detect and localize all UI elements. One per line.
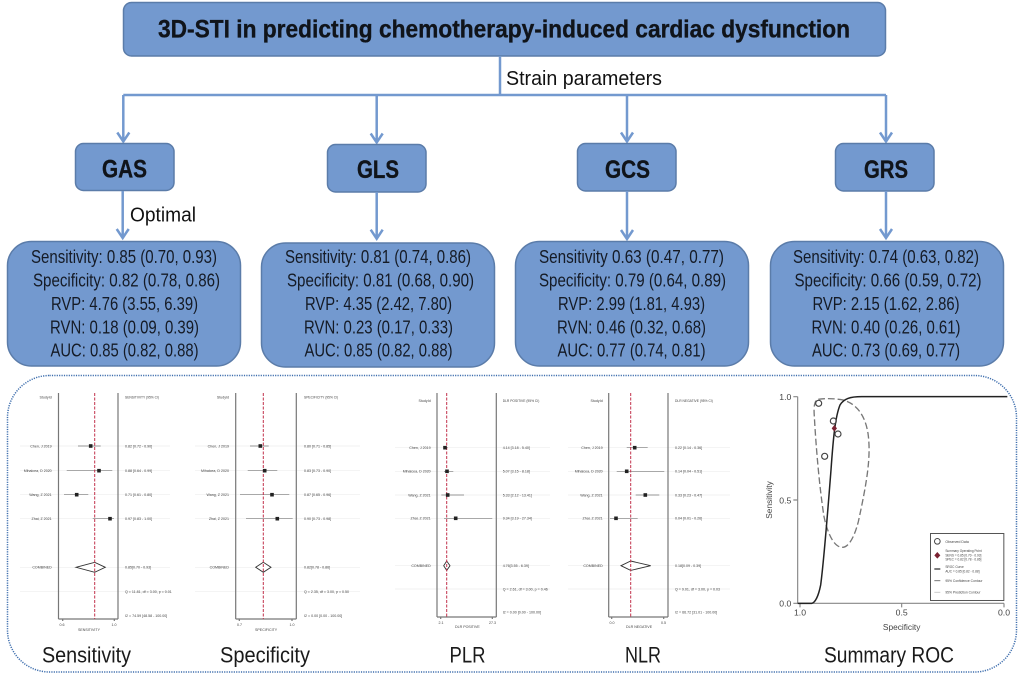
forest plot: NLR: 0.33 [0.23 - 0.47] <box>675 493 702 497</box>
panel: GAS results: Specificity: 0.82 (0.78, 0.86) <box>33 271 220 291</box>
forest plot: NLR: 0.14 [0.04 - 0.51] <box>675 470 702 474</box>
panel: GRS results: Specificity: 0.66 (0.59, 0.72) <box>794 271 982 291</box>
panel: GAS: GAS <box>102 156 147 184</box>
chart: summary ROC: Sensitivity <box>764 480 774 519</box>
title: 3D-STI in predicting chemotherapy-induced cardiac dysfunction <box>158 16 850 44</box>
forest plot: PLR: Chen, J 2019 <box>409 446 431 450</box>
forest plot: PLR: 5.33 [2.12 - 13.41] <box>503 493 532 497</box>
forest plot: specificity: 0.87 [0.65 - 0.96] <box>304 493 331 497</box>
forest plot: specificity: Q = 2.35, df = 3.00, p = 0.50 <box>304 590 349 594</box>
panel: GAS results: RVP: 4.76 (3.55, 6.39) <box>51 294 198 314</box>
forest plot: sensitivity: StudyId <box>40 396 52 400</box>
chart: summary ROC: 0.5 <box>779 495 792 505</box>
forest plot: sensitivity: 0.97 [0.83 - 1.00] <box>125 517 152 521</box>
forest plot: PLR: 9.34 [3.19 - 27.34] <box>503 517 532 521</box>
arrows: parameter to results <box>117 191 892 239</box>
forest plot: NLR: Q = 9.01, df = 3.00, p = 0.03 <box>675 587 720 591</box>
panel: GCS results: Sensitivity 0.63 (0.47, 0.77) <box>539 247 724 267</box>
forest plot: PLR: DLR POSITIVE (95% CI) <box>503 399 539 403</box>
forest plot: NLR: DLR NEGATIVE (95% CI) <box>675 399 713 403</box>
forest plot: NLR: DLR NEGATIVE <box>626 625 653 629</box>
forest plot: NLR: 0.18[0.09 - 0.39] <box>675 564 701 568</box>
panel: GLS results: Specificity: 0.81 (0.68, 0.90) <box>287 271 474 291</box>
forest plot: specificity: 0.90 [0.73 - 0.98] <box>304 517 331 521</box>
legend <box>930 533 1004 600</box>
panel: GCS <box>578 144 676 191</box>
forest plot: specificity <box>195 393 360 632</box>
panel: GAS <box>76 144 174 190</box>
forest plot: specificity: 0.82[0.78 - 0.86] <box>304 566 330 570</box>
title <box>124 2 886 56</box>
forest plot: specificity: 0.80 [0.71 - 0.85] <box>304 444 331 448</box>
forest plot: NLR: I2 = 66.72 [31.01 - 100.00] <box>675 611 717 615</box>
caption: PLR: PLR <box>450 642 486 668</box>
forest plot: specificity: 1.0 <box>290 623 294 627</box>
panel: GCS results <box>516 242 748 366</box>
forest plot: PLR: DLR POSITIVE <box>455 625 480 629</box>
legend: SENS = 0.85 [0.70 - 0.93] <box>945 553 982 557</box>
forest plot: sensitivity: SENSITIVITY (95% CI) <box>125 396 159 400</box>
forest plot: PLR: Zhai, Z 2021 <box>411 517 431 521</box>
panel: GRS results: RVN: 0.40 (0.26, 0.61) <box>812 317 960 337</box>
forest plot: specificity: Zhai, Z 2021 <box>209 517 229 521</box>
forest plot: NLR: Wang, Z 2021 <box>580 493 603 497</box>
forest plot: PLR: Wang, Z 2021 <box>408 493 431 497</box>
legend: Observed Data <box>945 540 969 544</box>
forest plot: NLR: Chen, J 2019 <box>581 446 603 450</box>
forest plot: sensitivity: Zhai, Z 2021 <box>32 517 52 521</box>
legend: Summary Operating Point <box>945 549 982 553</box>
panel: GRS: GRS <box>864 156 908 184</box>
forest plot: sensitivity: SENSITIVITY <box>78 628 101 632</box>
chart: summary ROC <box>764 392 1010 632</box>
panel: GLS <box>328 144 426 192</box>
panel: GAS results: RVN: 0.18 (0.09, 0.39) <box>50 317 199 337</box>
panel: GLS results: AUC: 0.85 (0.82, 0.88) <box>304 341 452 361</box>
forest plot: PLR: 5.07 [3.15 - 8.18] <box>503 470 530 474</box>
forest plot: NLR: 0.5 <box>661 621 666 625</box>
caption: sensitivity: Sensitivity <box>42 642 131 668</box>
arrow connectors: strain parameters branches <box>117 56 892 142</box>
caption: NLR: NLR <box>625 642 661 668</box>
forest plot: specificity: StudyId <box>217 396 229 400</box>
forest plot: NLR: StudyId <box>591 399 603 403</box>
forest plot: sensitivity: 1.0 <box>112 623 116 627</box>
caption: specificity: Specificity <box>220 642 310 668</box>
panel: GLS results <box>262 243 494 367</box>
panel: GCS results: RVN: 0.46 (0.32, 0.68) <box>557 317 706 337</box>
panel: GAS results <box>8 242 240 366</box>
panel: GRS <box>836 144 934 191</box>
panel: GLS results: Sensitivity: 0.81 (0.74, 0.86) <box>285 247 471 267</box>
forest plot: PLR: 27.3 <box>489 621 496 625</box>
forest plot: sensitivity: 0.82 [0.72 - 0.90] <box>125 444 152 448</box>
panel: dotted frame for plots <box>8 376 1016 672</box>
chart: summary ROC: 0.0 <box>779 599 792 609</box>
legend: SPEC = 0.82 [0.78 - 0.86] <box>945 558 982 562</box>
panel: GCS results: Specificity: 0.79 (0.64, 0.89) <box>539 271 726 291</box>
forest plot: specificity: SPECIFICITY (95% CI) <box>304 396 338 400</box>
caption: summary ROC: Summary ROC <box>824 642 954 668</box>
forest plot: specificity: COMBINED <box>210 566 229 570</box>
forest plot: NLR: COMBINED <box>583 564 603 568</box>
forest plot: PLR: COMBINED <box>411 564 431 568</box>
panel: GLS results: RVP: 4.35 (2.42, 7.80) <box>305 294 452 314</box>
legend: 95% Confidence Contour <box>945 579 983 583</box>
panel: GLS: GLS <box>357 156 399 184</box>
forest plot: NLR: Zhai, Z 2021 <box>583 517 603 521</box>
forest plot: sensitivity: 0.71 [0.61 - 0.80] <box>125 493 152 497</box>
label: optimal: Optimal <box>130 205 196 227</box>
forest plot: PLR: 4.14 [3.18 - 5.40] <box>503 446 530 450</box>
forest plot: sensitivity: 0.6 <box>60 623 64 627</box>
forest plot: NLR: Mihalcea, D 2020 <box>575 470 603 474</box>
forest plot: specificity: 0.7 <box>237 623 242 627</box>
forest plot: PLR: I2 = 0.00 [0.00 - 100.00] <box>503 611 541 615</box>
forest plot: PLR: 4.76[3.55 - 6.39] <box>503 564 529 568</box>
forest plot: specificity: I2 = 0.00 [0.00 - 100.00] <box>304 614 342 618</box>
panel: GRS results: Sensitivity: 0.74 (0.63, 0.82) <box>793 247 979 267</box>
forest plot: sensitivity <box>20 393 172 632</box>
panel: GCS results: AUC: 0.77 (0.74, 0.81) <box>558 341 706 361</box>
forest plot: NLR <box>568 393 730 629</box>
panel: GCS results: RVP: 2.99 (1.81, 4.93) <box>558 294 705 314</box>
forest plot: sensitivity: Chen, J 2019 <box>30 444 52 448</box>
forest plot: specificity: 0.83 [0.73 - 0.90] <box>304 469 331 473</box>
legend: SROC Curve <box>945 565 964 569</box>
forest plot: specificity: Wang, Z 2021 <box>207 493 229 497</box>
panel: GCS: GCS <box>605 156 650 184</box>
panel: GAS results: AUC: 0.85 (0.82, 0.88) <box>50 341 198 361</box>
forest plot: PLR: Q = 2.61, df = 3.00, p = 0.46 <box>503 587 548 591</box>
panel: GAS results: Sensitivity: 0.85 (0.70, 0.93) <box>31 247 217 267</box>
label: strain parameters: Strain parameters <box>506 68 662 90</box>
chart: summary ROC: 1.0 <box>794 607 806 617</box>
forest plot: sensitivity: I2 = 74.59 [48.58 - 100.00] <box>125 614 167 618</box>
forest plot: specificity: SPECIFICITY <box>255 628 278 632</box>
forest plot: sensitivity: 0.85[0.70 - 0.93] <box>125 566 151 570</box>
chart: summary ROC: 1.0 <box>779 392 792 402</box>
chart: summary ROC: 0.5 <box>896 607 908 617</box>
legend: 95% Prediction Contour <box>945 591 981 595</box>
forest plot: sensitivity: Wang, Z 2021 <box>29 493 52 497</box>
panel: GRS results <box>770 242 1004 366</box>
forest plot: PLR: StudyId <box>419 399 431 403</box>
forest plot: sensitivity: Mihalcea, D 2020 <box>24 469 52 473</box>
forest plot: PLR: 2.1 <box>438 621 444 625</box>
chart: summary ROC: Specificity <box>883 622 921 632</box>
forest plot: sensitivity: Q = 11.81, df = 3.00, p = 0.01 <box>125 590 172 594</box>
forest plot: PLR <box>395 393 550 629</box>
panel: GRS results: RVP: 2.15 (1.62, 2.86) <box>812 294 960 314</box>
chart: summary ROC: 0.0 <box>998 607 1010 617</box>
forest plot: NLR: 0.0 <box>610 621 614 625</box>
forest plot: PLR: Mihalcea, D 2020 <box>403 470 431 474</box>
forest plot: NLR: 0.22 [0.14 - 0.36] <box>675 446 702 450</box>
legend: AUC = 0.85 [0.82 - 0.88] <box>945 569 980 573</box>
forest plot: specificity: Chen, J 2019 <box>208 444 229 448</box>
panel: GLS results: RVN: 0.23 (0.17, 0.33) <box>304 317 453 337</box>
panel: GRS results: AUC: 0.73 (0.69, 0.77) <box>812 341 960 361</box>
forest plot: sensitivity: 0.88 [0.64 - 0.99] <box>125 469 152 473</box>
forest plot: NLR: 0.04 [0.01 - 0.26] <box>675 517 702 521</box>
forest plot: sensitivity: COMBINED <box>32 566 52 570</box>
forest plot: specificity: Mihalcea, D 2020 <box>201 469 229 473</box>
